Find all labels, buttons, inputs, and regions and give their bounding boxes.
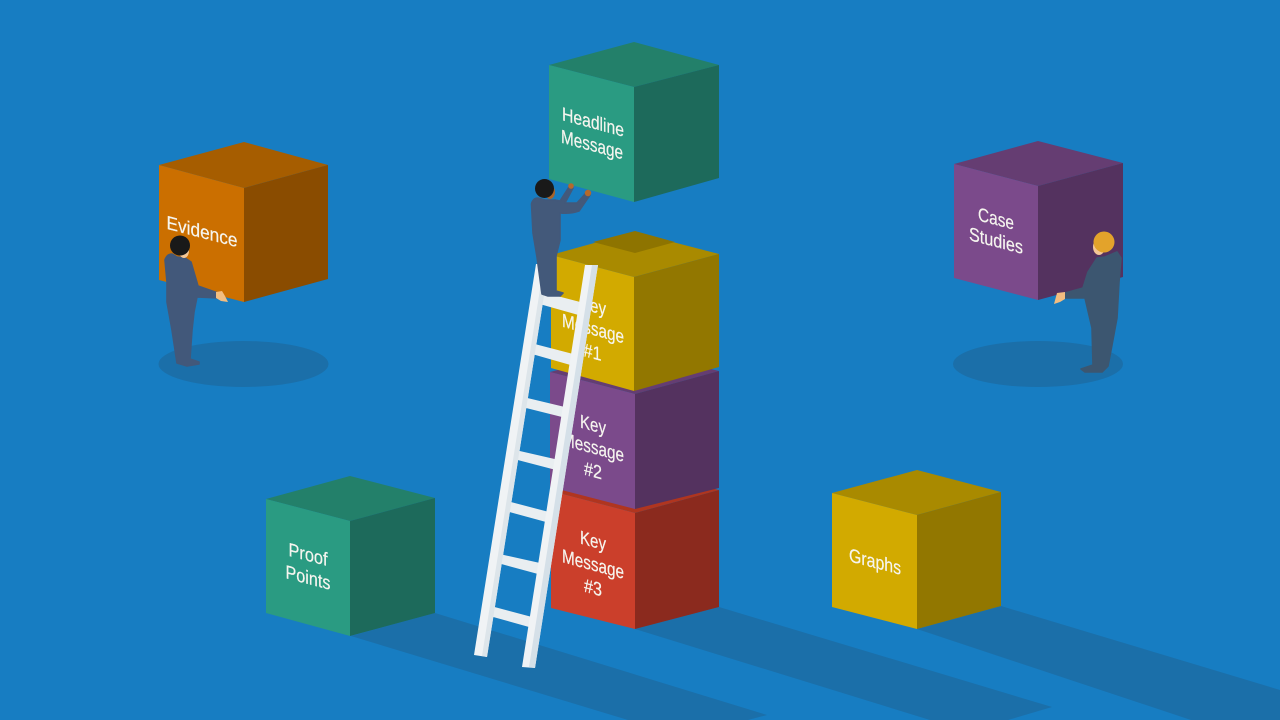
cube: headline message xyxy=(549,42,719,202)
label: key message 3 xyxy=(562,527,624,601)
label: proof points xyxy=(286,540,330,595)
label: proof points: Points xyxy=(286,562,330,595)
shadow: case studies cube xyxy=(953,341,1123,387)
cube: key message 3 xyxy=(551,470,719,629)
label: key message 2: Message xyxy=(562,428,624,467)
label: key message 1 xyxy=(562,292,624,366)
label: key message 2 xyxy=(562,411,624,484)
label: key message 2: #2 xyxy=(584,458,602,484)
label: headline message xyxy=(561,103,624,164)
label: key message 3: Message xyxy=(562,545,624,584)
label: headline message: Headline xyxy=(562,103,624,142)
label: key message 1: #1 xyxy=(584,339,602,366)
cube: case studies xyxy=(954,141,1123,300)
cube: proof points xyxy=(266,476,435,636)
label: case studies: Case xyxy=(978,205,1014,235)
label: case studies: Studies xyxy=(969,224,1023,259)
figure: man on ladder lifting headline xyxy=(532,179,591,296)
figure: man holding case studies cube xyxy=(1054,232,1121,372)
cube: graphs xyxy=(832,470,1001,629)
label: key message 3: #3 xyxy=(584,575,602,601)
label: headline message: Message xyxy=(561,126,623,164)
ladder xyxy=(474,264,598,668)
label: key message 3: Key xyxy=(580,527,606,555)
figure: man holding evidence cube xyxy=(165,236,228,366)
label: key message 1: Key xyxy=(580,292,606,320)
shadow: evidence cube xyxy=(158,341,328,387)
label: graphs: Graphs xyxy=(849,546,901,580)
label: evidence: Evidence xyxy=(166,213,238,252)
ground shadows of the floor cubes xyxy=(351,606,1280,720)
label: case studies xyxy=(969,205,1023,259)
cube: key message 2 xyxy=(550,350,719,509)
label: key message 1: Message xyxy=(562,310,624,348)
cube: evidence xyxy=(159,142,328,302)
label: key message 2: Key xyxy=(580,411,606,439)
top square shadow xyxy=(593,231,675,253)
cube: key message 1 xyxy=(551,231,719,391)
label: proof points: Proof xyxy=(288,540,328,571)
